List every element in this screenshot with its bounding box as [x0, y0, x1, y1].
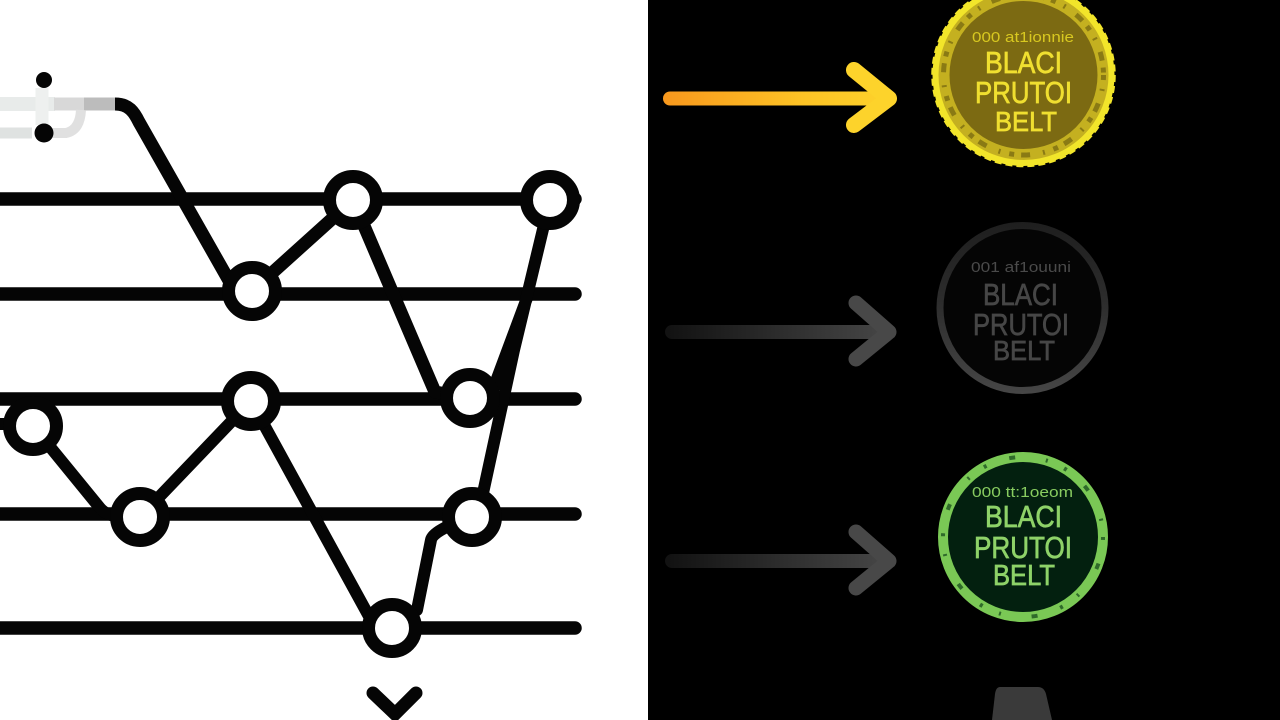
- badge: yellow: [932, 0, 1114, 166]
- badge: green: BELT: [993, 560, 1055, 592]
- badge: green: [943, 457, 1103, 617]
- lower data line: [0, 200, 550, 628]
- badge: green: BLACI: [985, 499, 1062, 534]
- badge: yellow: 000 at1ionnie: [972, 29, 1074, 46]
- faded connector at top left: [0, 72, 115, 142]
- badge: dim grey: 001 af1ouuni: [971, 259, 1071, 276]
- badge: dim grey: BELT: [993, 335, 1055, 366]
- panel: line chart: [0, 0, 648, 720]
- icon: grey tab at bottom: [992, 687, 1052, 720]
- arrow: grey middle: [672, 303, 889, 359]
- data point markers: [10, 176, 574, 652]
- arrow: yellow: [670, 70, 889, 125]
- badge: green: 000 tt:1oeom: [972, 484, 1073, 501]
- upper data line: [115, 104, 470, 398]
- arrow: grey lower: [672, 532, 889, 588]
- badge: yellow: BELT: [995, 106, 1057, 137]
- badge: dim grey: PRUTOI: [973, 307, 1069, 342]
- badge: yellow: BLACI: [985, 45, 1062, 80]
- badge: green: PRUTOI: [974, 530, 1072, 565]
- badge: dim grey: BLACI: [983, 277, 1058, 312]
- badge: yellow: PRUTOI: [975, 75, 1072, 110]
- badge: dim grey: [940, 226, 1105, 390]
- panel: badges on black: [648, 0, 1280, 720]
- icon: down chevron: [373, 693, 416, 714]
- horizontal track lines: [0, 199, 575, 628]
